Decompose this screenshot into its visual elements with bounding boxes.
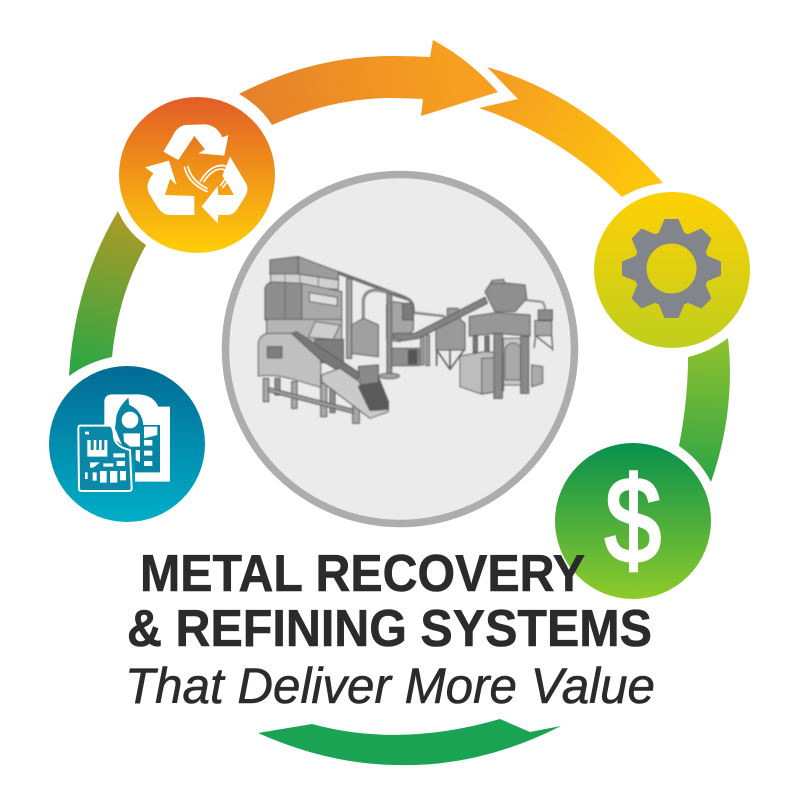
illustration: recovery plant: [258, 257, 553, 423]
icon: gear: [622, 219, 721, 318]
step: processing gear circle: [594, 192, 750, 348]
subtitle: That Deliver More Value: [125, 658, 655, 714]
arrow: right arc: [679, 338, 730, 482]
heading line 2: & REFINING SYSTEMS: [127, 600, 652, 658]
heading line 1: METAL RECOVERY: [140, 545, 585, 603]
icon: document and circuit board: [78, 394, 170, 491]
arrow: left arc: [69, 211, 146, 376]
step: value dollar circle: [555, 443, 711, 599]
arrow: upper right arc: [479, 67, 663, 197]
panel: central machinery circle: [226, 174, 574, 524]
arrow: top arc: [239, 40, 498, 125]
arrow: bottom arc: [258, 719, 561, 765]
step: e-waste circle: [49, 366, 205, 522]
plant: center and right equipment: [380, 279, 553, 398]
step: recycling circle: [119, 97, 275, 253]
plant: left machine and chute: [258, 257, 407, 423]
icon: recycling arrows with metal scrap: [145, 124, 247, 223]
title: [125, 545, 655, 714]
icon: dollar sign: $: [605, 452, 661, 588]
